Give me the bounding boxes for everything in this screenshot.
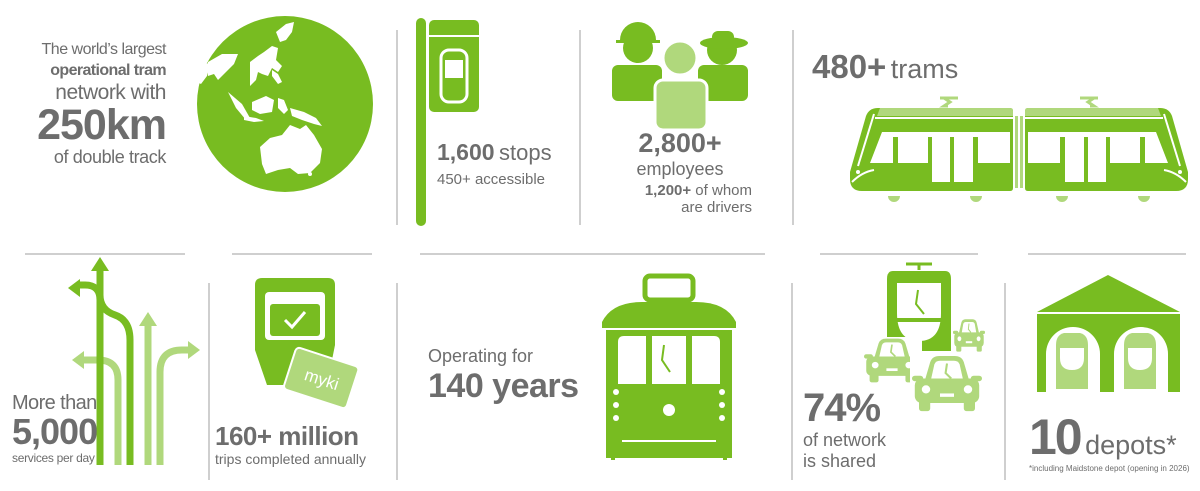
text: world's largest network: The world’s largest: [42, 41, 166, 58]
text: stops: 450+ accessible: [437, 171, 545, 188]
text: network shared: of network: [803, 430, 886, 450]
text: employees: [636, 128, 752, 216]
text: world's largest network: [37, 41, 166, 167]
text: network shared: is shared: [803, 451, 876, 471]
icon: tram stop sign: [416, 18, 479, 226]
text: employees: 2,800+: [638, 128, 722, 158]
text: trips: [215, 421, 366, 467]
text: trams: 480+ trams: [812, 48, 958, 85]
text: trips: trips completed annually: [215, 451, 366, 467]
text: services: 5,000: [12, 411, 97, 452]
text: depots: 10 depots*: [1029, 409, 1177, 465]
text: trips: 160+ million: [215, 421, 359, 451]
text: world's largest network: of double track: [54, 147, 166, 167]
text: services: More than: [12, 392, 97, 414]
text: world's largest network: network with: [55, 81, 166, 104]
text: operating years: 140 years: [428, 367, 579, 405]
text: services: [12, 392, 97, 465]
text: employees: are drivers: [681, 199, 752, 216]
text: operating years: Operating for: [428, 346, 533, 366]
icon: heritage tram: [602, 274, 736, 460]
icon: myki reader and card: [255, 278, 358, 408]
icon: myki reader and card: myki: [302, 365, 341, 394]
text: depots: *including Maidstone depot (opening in 2026): [1029, 464, 1190, 473]
text: services: services per day: [12, 451, 95, 465]
icon: globe: [197, 16, 373, 192]
text: network shared: [803, 386, 886, 471]
text: operating years: [428, 346, 579, 405]
text: world's largest network: 250km: [37, 101, 166, 149]
text: employees: 1,200+ of whom: [645, 182, 752, 199]
icon: route arrows: [68, 257, 200, 465]
text: world's largest network: operational tram: [50, 62, 166, 79]
text: employees: employees: [636, 159, 724, 179]
text: stops: [437, 139, 552, 188]
text: network shared: 74%: [803, 386, 880, 430]
icon: employees: [612, 22, 748, 128]
icon: modern tram: [850, 96, 1188, 202]
text: stops: 1,600 stops: [437, 139, 552, 165]
